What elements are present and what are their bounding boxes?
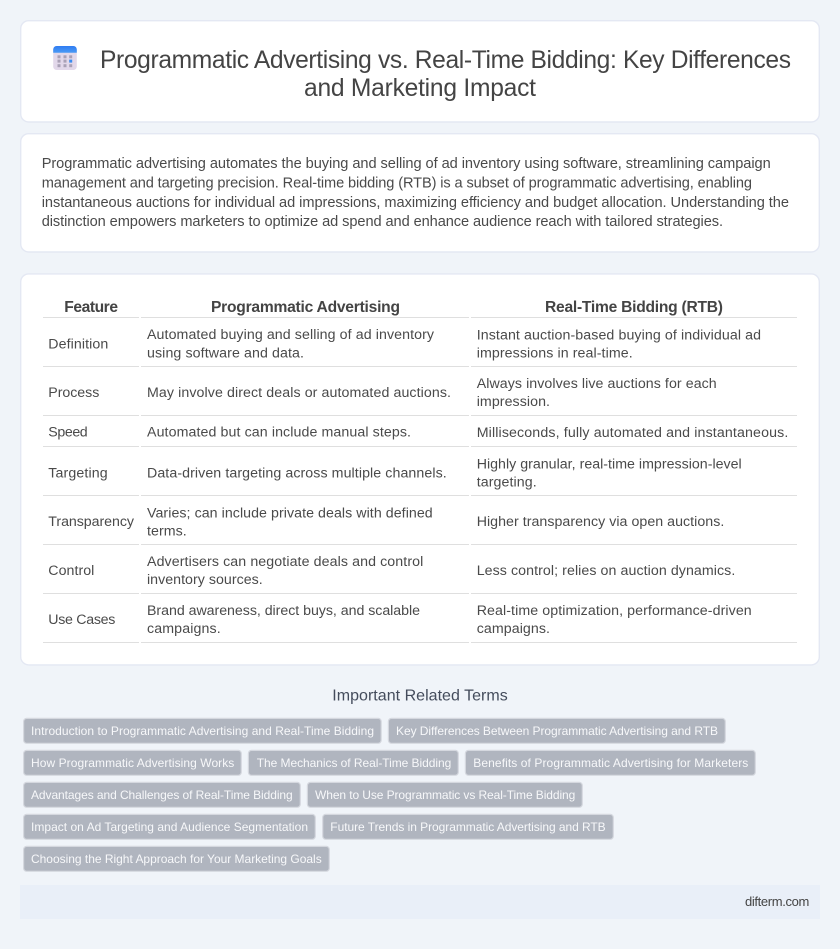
panel: comparison table	[21, 274, 819, 665]
row: control: Less control; relies on auction dynamics.	[477, 563, 735, 579]
tag: Benefits of Programmatic Advertising for Marketers	[473, 756, 748, 770]
panel: title header	[21, 21, 819, 122]
row: process	[48, 376, 717, 410]
row: targeting	[48, 456, 742, 490]
row: control	[48, 554, 735, 588]
footer bar	[20, 885, 820, 919]
table header row: Programmatic Advertising	[211, 299, 400, 316]
tag: Impact on Ad Targeting and Audience Segmentation	[31, 820, 308, 834]
intro text: management and targeting precision. Real-time bidding (RTB) is a subset of programmatic advertising, enabling	[42, 176, 752, 192]
table header row: Feature	[64, 299, 118, 316]
row: speed: Milliseconds, fully automated and instantaneous.	[477, 425, 788, 441]
panel: intro paragraph	[21, 134, 819, 252]
row: control: Advertisers can negotiate deals and control	[147, 554, 423, 570]
row: definition: impressions in real-time.	[477, 345, 633, 361]
row: use cases: Use Cases	[48, 612, 115, 628]
tag: The Mechanics of Real-Time Bidding	[257, 756, 451, 770]
tag: Choosing the Right Approach for Your Marketing Goals	[31, 852, 322, 866]
row: use cases: campaigns.	[147, 621, 221, 637]
row: use cases: Real-time optimization, performance-driven	[477, 603, 752, 619]
intro text	[42, 156, 789, 230]
tag	[24, 718, 381, 743]
row: control: inventory sources.	[147, 572, 263, 588]
row: definition: Instant auction-based buying of individual ad	[477, 327, 761, 343]
row: targeting: Data-driven targeting across multiple channels.	[147, 465, 447, 481]
tag: Introduction to Programmatic Advertising and Real-Time Bidding	[31, 724, 374, 738]
row: transparency: Varies; can include private deals with defined	[147, 505, 433, 521]
table header row	[64, 299, 723, 316]
row: targeting: targeting.	[477, 474, 537, 490]
icon: calendar grid	[53, 46, 77, 70]
tag	[24, 814, 315, 839]
row: process: impression.	[477, 394, 550, 410]
row: speed: Automated but can include manual steps.	[147, 425, 411, 441]
row: speed	[48, 425, 788, 441]
title	[100, 47, 791, 102]
row: definition: using software and data.	[147, 345, 304, 361]
row: transparency	[48, 505, 724, 539]
title: and Marketing Impact	[304, 75, 536, 102]
row: transparency: terms.	[147, 523, 187, 539]
row: process: May involve direct deals or automated auctions.	[147, 385, 451, 401]
row: use cases: Brand awareness, direct buys, and scalable	[147, 603, 420, 619]
tag: Key Differences Between Programmatic Advertising and RTB	[396, 724, 718, 738]
intro text: instantaneous auctions for individual ad impressions, maximizing efficiency and budget allocation. Understanding the	[42, 195, 789, 211]
intro text: distinction empowers marketers to optimize ad spend and enhance audience reach with tailored strategies.	[42, 214, 723, 230]
tag	[307, 782, 582, 807]
footer bar: difterm.com	[745, 894, 809, 909]
heading: important related terms: Important Related Terms	[332, 688, 508, 705]
row: use cases: campaigns.	[477, 621, 550, 637]
tag: Future Trends in Programmatic Advertising and RTB	[330, 820, 606, 834]
tag	[323, 814, 613, 839]
tag: How Programmatic Advertising Works	[31, 756, 234, 770]
tag: When to Use Programmatic vs Real-Time Bidding	[315, 788, 575, 802]
tag	[24, 782, 300, 807]
row: definition: Automated buying and selling of ad inventory	[147, 327, 435, 343]
row: transparency: Higher transparency via open auctions.	[477, 514, 724, 530]
panel: related term tags	[24, 718, 755, 871]
tag	[24, 750, 241, 775]
tag	[465, 750, 755, 775]
tag	[248, 750, 458, 775]
row: process: Process	[48, 385, 99, 401]
row: targeting: Highly granular, real-time impression-level	[477, 456, 742, 472]
row: transparency: Transparency	[48, 514, 135, 530]
row: control: Control	[48, 563, 94, 579]
tag	[388, 718, 725, 743]
row: process: Always involves live auctions for each	[477, 376, 717, 392]
row: use cases	[48, 603, 752, 637]
title: Programmatic Advertising vs. Real-Time Bidding: Key Differences	[100, 47, 791, 74]
tag	[24, 846, 329, 871]
row: speed: Speed	[48, 425, 88, 441]
table header row: Real-Time Bidding (RTB)	[545, 299, 723, 316]
row: definition: Definition	[48, 336, 108, 352]
tag: Advantages and Challenges of Real-Time Bidding	[31, 788, 293, 802]
row: targeting: Targeting	[48, 465, 108, 481]
intro text: Programmatic advertising automates the buying and selling of ad inventory using software, streamlining campaign	[42, 156, 771, 172]
row: definition	[48, 327, 761, 361]
